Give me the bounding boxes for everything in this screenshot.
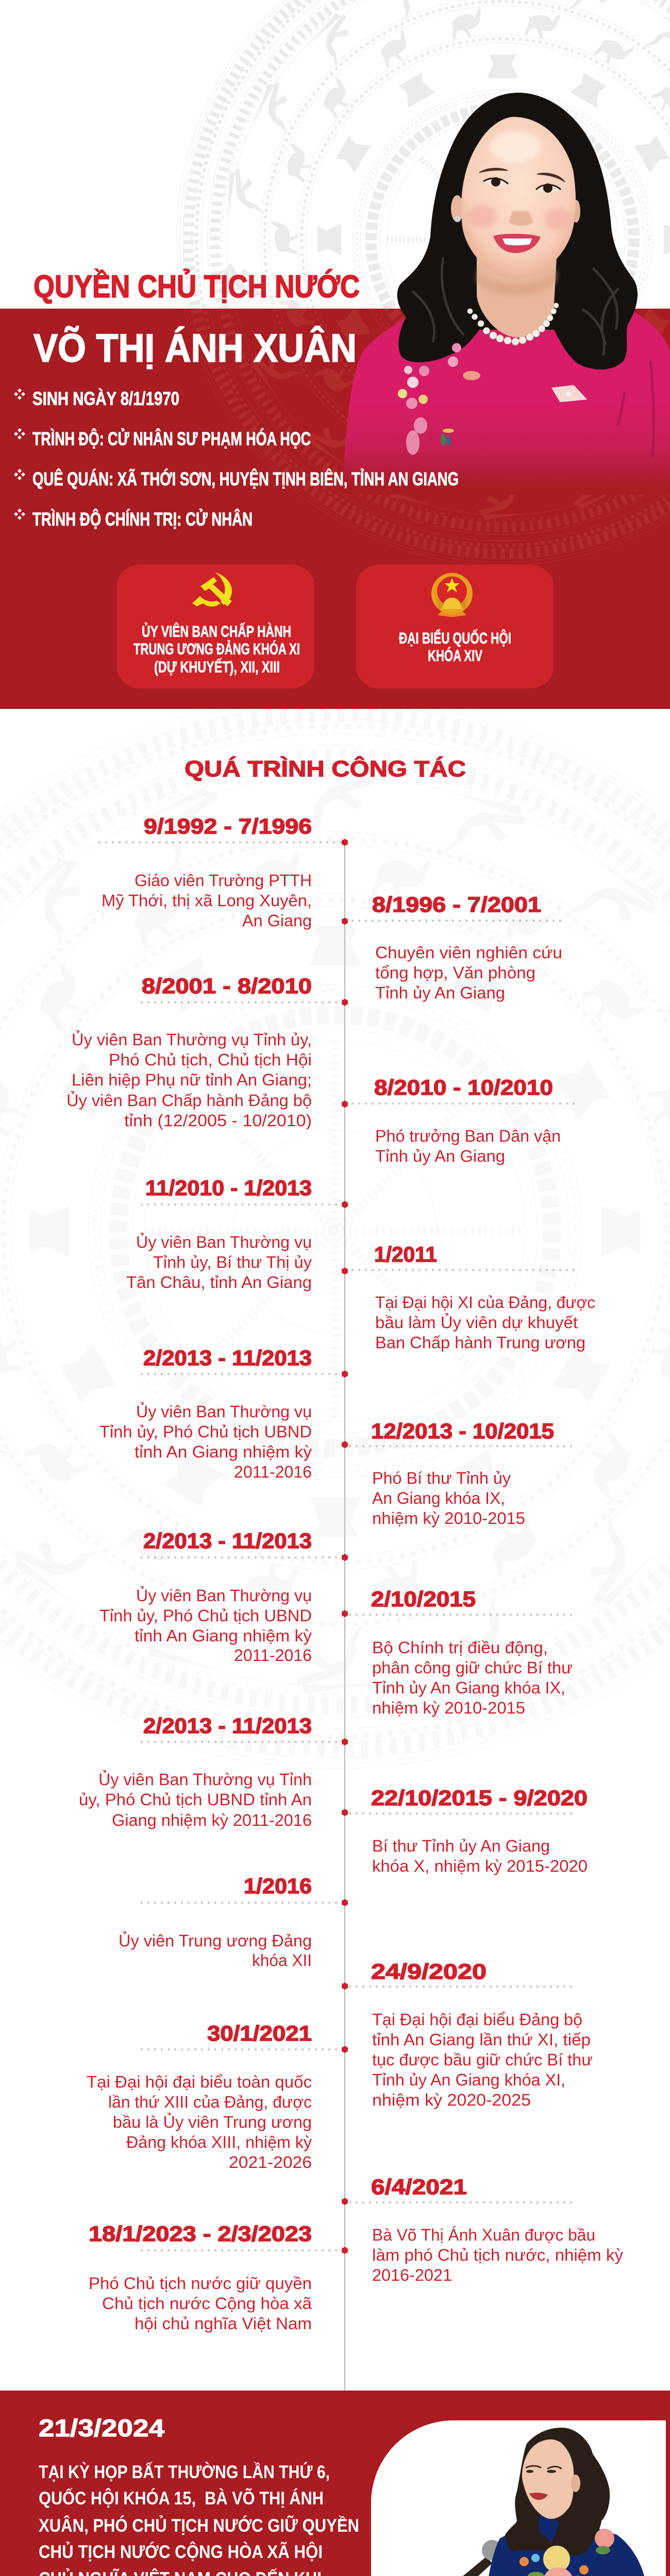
description: Giáo viên Trường PTTH: [135, 871, 312, 890]
description: Ủy viên Ban Thường vụ Tỉnh: [98, 1770, 312, 1789]
description: làm phó Chủ tịch nước, nhiệm kỳ: [372, 2246, 623, 2264]
date: 9/1992 - 7/1996: [144, 814, 312, 838]
marker: [342, 1982, 348, 1990]
entry: 2/2013 - 11/2013 (third): [79, 1714, 348, 1829]
description: Phó Bí thư Tỉnh ủy: [372, 1469, 511, 1487]
photo panel: speaker in blue áo dài: [371, 2420, 666, 2576]
entry: 1/2011: [342, 1242, 595, 1352]
icon: bullet: [14, 509, 25, 520]
entry: 11/2010 - 1/2013: [126, 1176, 348, 1292]
microphone: [463, 2540, 498, 2576]
description: Tân Châu, tỉnh An Giang: [126, 1273, 312, 1292]
date: 1/2016: [244, 1874, 312, 1898]
background: faint drum pattern behind timeline: [0, 694, 670, 1769]
marker: [342, 1809, 348, 1816]
description: Tỉnh ủy An Giang khóa IX,: [372, 1679, 565, 1697]
description: 2021-2026: [229, 2153, 312, 2172]
description: Phó Chủ tịch, Chủ tịch Hội: [109, 1050, 312, 1069]
entry: 30/1/2021: [87, 2021, 348, 2172]
marker: [342, 1267, 348, 1275]
date: 1/2011: [374, 1242, 437, 1266]
description: [372, 1469, 525, 1528]
description: tỉnh (12/2005 - 10/2010): [124, 1111, 312, 1130]
description: Tại Đại hội đại biểu Đảng bộ: [372, 2010, 582, 2029]
date: 18/1/2023 - 2/3/2023: [89, 2222, 312, 2246]
date: 8/2001 - 8/2010: [142, 974, 312, 998]
description: [372, 1638, 573, 1717]
entry: 22/10/2015 - 9/2020: [342, 1786, 588, 1875]
entry: 12/2013 - 10/2015: [342, 1419, 577, 1528]
description: Ủy viên Ban Thường vụ: [136, 1402, 312, 1421]
description: [375, 1293, 595, 1352]
description: Tỉnh ủy, Bí thư Thị ủy: [153, 1253, 312, 1272]
description: [375, 943, 562, 1002]
closing text: QUỐC HỘI KHÓA 15, BÀ VÕ THỊ ÁNH: [39, 2488, 324, 2509]
marker: [342, 918, 348, 925]
entry: 18/1/2023 - 2/3/2023: [89, 2222, 348, 2333]
marker: [342, 998, 348, 1006]
description: [99, 1586, 312, 1665]
description: phân công giữ chức Bí thư: [372, 1658, 573, 1677]
entry: 2/2013 - 11/2013 (first): [99, 1346, 348, 1481]
description: Ủy viên Ban Thường vụ Tỉnh ủy,: [72, 1030, 312, 1049]
description: Tỉnh ủy, Phó Chủ tịch UBND: [99, 1422, 312, 1441]
description: Giang nhiệm kỳ 2011-2016: [112, 1811, 312, 1829]
entry: 24/9/2020: [342, 1959, 593, 2109]
description: tục được bầu giữ chức Bí thư: [372, 2050, 593, 2069]
floral embroidery: [398, 343, 480, 455]
card text: [399, 629, 511, 665]
date: 2/2013 - 11/2013: [143, 1714, 312, 1738]
description: [99, 1402, 312, 1481]
fact: political education: TRÌNH ĐỘ CHÍNH TRỊ: CỬ NHÂN: [32, 508, 253, 530]
description: Mỹ Thới, thị xã Long Xuyên,: [102, 891, 312, 910]
profile facts list: [14, 388, 459, 530]
description: [126, 1233, 312, 1292]
icon: bullet: [14, 469, 25, 480]
marker: [342, 1899, 348, 1906]
icon: hammer and sickle: [192, 572, 232, 606]
description: nhiệm kỳ 2010-2015: [372, 1699, 525, 1717]
card text: TRUNG ƯƠNG ĐẢNG KHÓA XI: [133, 639, 300, 658]
icon: national emblem: [431, 573, 473, 617]
description: tổng hợp, Văn phòng: [375, 963, 535, 982]
closing text: [39, 2462, 361, 2576]
description: Ủy viên Trung ương Đảng: [119, 1931, 312, 1950]
date: 11/2010 - 1/2013: [145, 1176, 312, 1200]
marker: [342, 2046, 348, 2053]
description: An Giang khóa IX,: [372, 1489, 505, 1507]
description: An Giang: [242, 911, 312, 930]
description: Ủy viên Ban Thường vụ: [136, 1233, 312, 1251]
date: 24/9/2020: [371, 1959, 487, 1984]
description: [372, 1837, 588, 1875]
card: Central Committee: [117, 565, 314, 688]
description: [372, 2010, 593, 2109]
description: Tại Đại hội XI của Đảng, được: [375, 1293, 595, 1312]
closing text: XUÂN, PHÓ CHỦ TỊCH NƯỚC GIỮ QUYỀN: [39, 2515, 359, 2536]
title: role: QUYỀN CHỦ TỊCH NƯỚC: [34, 269, 360, 304]
marker: [342, 839, 348, 846]
description: Bí thư Tỉnh ủy An Giang: [372, 1837, 550, 1855]
entry: 9/1992 - 7/1996: [99, 814, 348, 930]
portrait: Võ Thị Ánh Xuân in magenta áo dài: [344, 93, 670, 495]
description: Bà Võ Thị Ánh Xuân được bầu: [372, 2226, 595, 2244]
description: Tỉnh ủy An Giang: [375, 984, 505, 1002]
description: Chủ tịch nước Cộng hòa xã: [102, 2294, 312, 2313]
description: nhiệm kỳ 2010-2015: [372, 1509, 525, 1528]
entry: 6/4/2021: [342, 2175, 623, 2284]
description: [372, 2226, 623, 2284]
description: bầu là Ủy viên Trung ương: [113, 2113, 312, 2131]
description: Đảng khóa XIII, nhiệm kỳ: [126, 2133, 312, 2151]
description: [102, 871, 312, 930]
entry: 1/2016: [119, 1874, 348, 1970]
description: Tỉnh ủy, Phó Chủ tịch UBND: [99, 1606, 312, 1625]
date: 6/4/2021: [371, 2175, 467, 2199]
description: tỉnh An Giang nhiệm kỳ: [135, 1443, 312, 1461]
card: National Assembly deputy: [356, 565, 554, 688]
timeline axis: [344, 842, 345, 2391]
description: bầu làm Ủy viên dự khuyết: [375, 1313, 578, 1332]
background: bronze drum pattern on white: [176, 0, 670, 309]
card text: [133, 622, 300, 676]
floral embroidery: [520, 2529, 614, 2576]
icon: bullet: [14, 428, 25, 439]
marker: [342, 1738, 348, 1745]
date: 12/2013 - 10/2015: [371, 1419, 554, 1443]
date: 2/10/2015: [371, 1587, 476, 1611]
description: hội chủ nghĩa Việt Nam: [135, 2314, 312, 2333]
pearl necklace: [467, 303, 559, 345]
description: [66, 1030, 312, 1130]
fact: education: TRÌNH ĐỘ: CỬ NHÂN SƯ PHẠM HÓA HỌC: [32, 428, 311, 449]
description: khóa XII: [252, 1951, 312, 1970]
date: 2/2013 - 11/2013: [143, 1346, 312, 1370]
marker: [342, 1370, 348, 1378]
panel: red profile band: [0, 309, 670, 709]
description: lần thứ XIII của Đảng, được: [108, 2093, 312, 2111]
panel: 21/3/2024 closing band: [0, 2391, 670, 2576]
description: Tỉnh ủy An Giang: [375, 1147, 505, 1165]
closing text: CHỦ TỊCH NƯỚC CỘNG HÒA XÃ HỘI: [39, 2541, 323, 2562]
marker: [342, 2198, 348, 2205]
fact: birth date: SINH NGÀY 8/1/1970: [32, 388, 179, 409]
date: 8/2010 - 10/2010: [374, 1075, 553, 1099]
description: [79, 1770, 312, 1829]
description: [375, 1127, 561, 1165]
description: Ủy viên Ban Thường vụ: [136, 1586, 312, 1605]
card text: KHÓA XIV: [428, 646, 482, 665]
description: Bộ Chính trị điều động,: [372, 1638, 548, 1657]
description: [87, 2073, 312, 2172]
marker: [342, 2247, 348, 2254]
description: 2011-2016: [234, 1463, 312, 1481]
marker: [342, 1610, 348, 1617]
description: Ban Chấp hành Trung ương: [375, 1333, 585, 1352]
description: Ủy viên Ban Chấp hành Đảng bộ: [66, 1091, 312, 1110]
entry: 8/1996 - 7/2001: [342, 892, 565, 1002]
fact: hometown: QUÊ QUÁN: XÃ THỚI SƠN, HUYỆN TỊNH BIÊN, TỈNH AN GIANG: [32, 468, 459, 489]
heading: career timeline: QUÁ TRÌNH CÔNG TÁC: [185, 755, 466, 782]
date: 2/2013 - 11/2013: [143, 1529, 312, 1553]
description: Tỉnh ủy An Giang khóa XI,: [372, 2071, 565, 2089]
description: ủy, Phó Chủ tịch UBND tỉnh An: [79, 1790, 312, 1809]
description: 2016-2021: [372, 2266, 452, 2284]
description: Chuyên viên nghiên cứu: [375, 943, 562, 962]
title: name: VÕ THỊ ÁNH XUÂN: [34, 326, 357, 370]
entry: 8/2001 - 8/2010: [66, 974, 348, 1130]
marker: [342, 1201, 348, 1208]
card text: ỦY VIÊN BAN CHẤP HÀNH: [142, 622, 291, 640]
description: Tại Đại hội đại biểu toàn quốc: [87, 2073, 312, 2091]
entry: 2/10/2015: [342, 1587, 577, 1717]
card text: ĐẠI BIỂU QUỐC HỘI: [399, 629, 511, 647]
description: 2011-2016: [234, 1646, 312, 1665]
icon: bullet: [14, 388, 25, 400]
description: nhiệm kỳ 2020-2025: [372, 2091, 531, 2109]
date: 8/1996 - 7/2001: [372, 892, 541, 917]
date: 30/1/2021: [207, 2021, 312, 2045]
description: Phó Chủ tịch nước giữ quyền: [89, 2274, 312, 2293]
date: 22/10/2015 - 9/2020: [371, 1786, 588, 1810]
description: tỉnh An Giang nhiệm kỳ: [135, 1626, 312, 1645]
date: 21/3/2024: [39, 2414, 164, 2442]
national assembly pin: [552, 385, 587, 402]
description: Phó trưởng Ban Dân vận: [375, 1127, 561, 1145]
description: tỉnh An Giang lần thứ XI, tiếp: [372, 2030, 591, 2049]
marker: [342, 1441, 348, 1448]
marker: [342, 1100, 348, 1108]
description: [89, 2274, 312, 2333]
description: Liên hiệp Phụ nữ tỉnh An Giang;: [72, 1071, 312, 1089]
closing text: TẠI KỲ HỌP BẤT THƯỜNG LẦN THỨ 6,: [39, 2462, 330, 2482]
marker: [342, 1554, 348, 1561]
description: [119, 1931, 312, 1970]
entry: 8/2010 - 10/2010: [342, 1075, 580, 1165]
card text: (DỰ KHUYẾT), XII, XIII: [154, 658, 280, 676]
description: khóa X, nhiệm kỳ 2015-2020: [372, 1857, 588, 1875]
entry: 2/2013 - 11/2013 (second): [99, 1529, 348, 1665]
